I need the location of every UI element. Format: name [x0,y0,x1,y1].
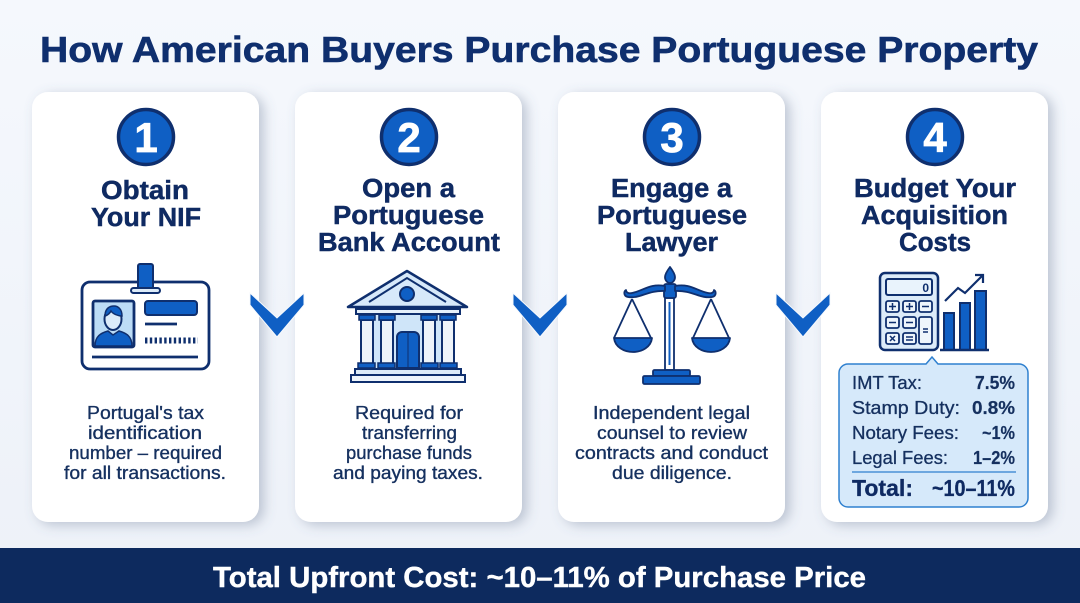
heading: step 3 [597,175,747,257]
heading: step 2: Bank Account [318,229,501,257]
row: total [852,475,1015,501]
badge: number 1 [118,110,174,164]
row: stamp duty: 0.8% [972,397,1015,418]
text: step 3 description: counsel to review [597,423,748,443]
text: step 2 description: Required for [355,403,463,423]
badge: number 4: 4 [923,114,947,161]
badge: number 2 [382,110,436,164]
icon: ID card [82,264,209,369]
heading: step 1 [91,177,201,232]
heading: step 4: Acquisition [861,202,1008,230]
text: step 2 description [333,403,483,483]
title: How American Buyers Purchase Portuguese Property [40,29,1038,70]
heading: step 4: Costs [899,229,971,257]
heading: step 1: Your NIF [91,204,201,232]
row: legal fees: 1–2% [973,447,1015,468]
badge: number 3 [644,110,700,164]
panel: step 2 bank account [295,92,522,522]
footer banner [0,548,1080,603]
row: legal fees [852,447,1015,468]
text: step 2 description: purchase funds [346,443,472,463]
heading: step 4 [854,175,1016,257]
text: step 1 description: identification [88,423,202,443]
heading: step 2 [318,175,501,257]
heading: step 3: Lawyer [625,229,718,257]
row: legal fees: Legal Fees: [852,447,948,468]
row: total: Total: [852,475,913,501]
heading: step 2: Open a [362,175,456,203]
text: step 3 description: due diligence. [612,463,732,483]
row: notary fees [852,422,1015,443]
row: notary fees: ~1% [982,422,1015,443]
row: IMT tax [852,372,1015,393]
text: step 2 description: transferring [362,423,457,443]
row: stamp duty: Stamp Duty: [852,397,960,418]
arrow: step 3 to 4 [776,293,830,337]
badge: number 2: 2 [397,114,421,161]
panel: step 3 lawyer [558,92,785,522]
text: step 1 description [64,403,226,483]
callout: cost breakdown table [839,357,1028,507]
badge: number 4 [908,110,962,164]
badge: number 1: 1 [134,114,158,161]
icon: growth bar chart [940,275,989,350]
panel: step 4 acquisition costs [821,92,1048,522]
arrow: step 1 to 2 [250,293,304,337]
heading: step 2: Portuguese [333,202,484,230]
panel: step 1 obtain NIF [32,92,259,522]
text: step 1 description: for all transactions. [64,463,226,483]
text: step 2 description: and paying taxes. [333,463,483,483]
badge: number 3: 3 [660,114,684,161]
text: step 3 description: contracts and conduct [575,443,768,463]
heading: step 3: Engage a [611,175,733,203]
icon: calculator [880,273,938,350]
row: stamp duty [852,397,1015,418]
row: IMT tax: IMT Tax: [852,372,922,393]
row: notary fees: Notary Fees: [852,422,959,443]
icon: bank building [348,271,467,382]
icon: calculator: 0 [922,281,929,295]
text: step 3 description [575,403,768,483]
heading: step 4: Budget Your [854,175,1016,203]
row: total: ~10–11% [932,475,1015,501]
text: step 1 description: Portugal's tax [87,403,204,423]
footer banner: Total Upfront Cost: ~10–11% of Purchase Price [213,562,866,594]
heading: step 1: Obtain [101,177,189,205]
text: step 3 description: Independent legal [593,403,750,423]
text: step 1 description: number – required [69,443,222,463]
icon: scales of justice [614,267,730,384]
row: IMT tax: 7.5% [975,372,1015,393]
arrow: step 2 to 3 [513,293,567,337]
heading: step 3: Portuguese [597,202,747,230]
